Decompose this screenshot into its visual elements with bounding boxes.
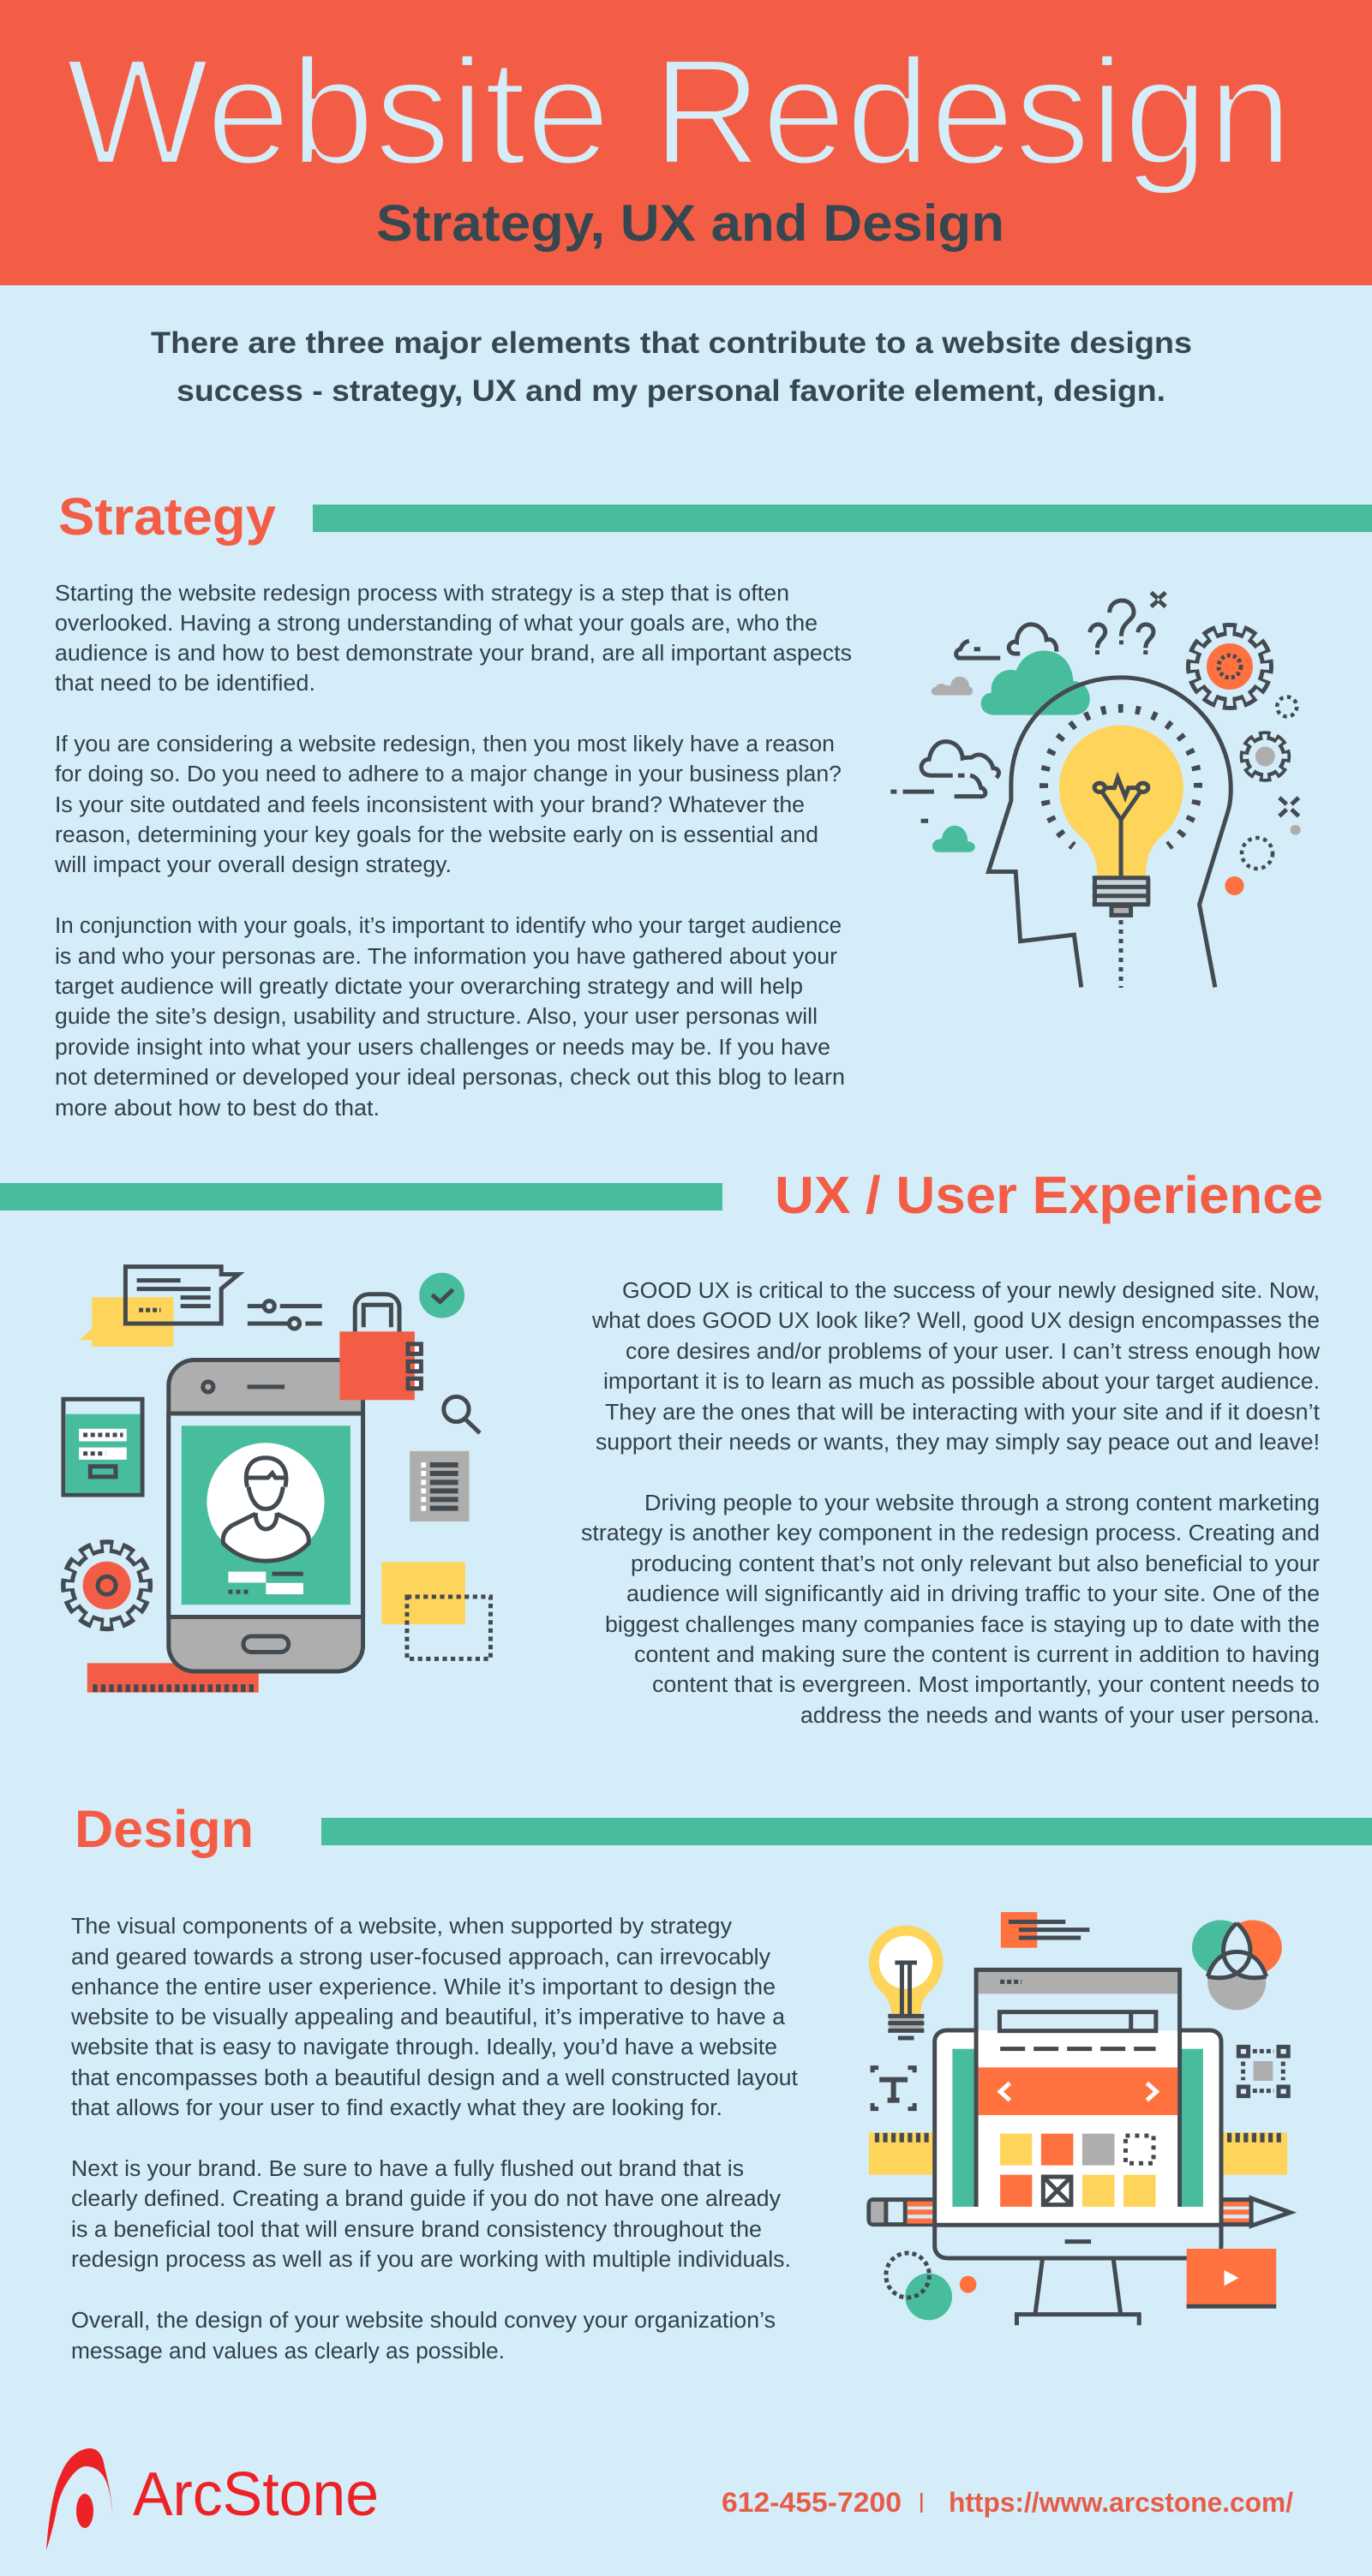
text block: ux: content that is evergreen. Most importantly, your content needs to: [652, 1673, 1320, 1697]
text block: ux: core desires and/or problems of your user. I can’t stress enough how: [626, 1340, 1321, 1364]
intro text: success - strategy, UX and my personal favorite element, design.: [177, 374, 1165, 408]
text block: ux: strategy is another key component in the redesign process. Creating and: [581, 1521, 1320, 1545]
text block: design: The visual components of a website, when supported by strategy: [71, 1915, 732, 1939]
text block: strategy: that need to be identified.: [55, 672, 315, 696]
text block: strategy: guide the site’s design, usability and structure. Also, your user personas will: [55, 1005, 818, 1029]
text block: design: enhance the entire user experience. While it’s important to design the: [71, 1975, 776, 1999]
text block: ux: GOOD UX is critical to the success of your newly designed site. Now,: [622, 1279, 1320, 1303]
heading: design: Design: [75, 1800, 254, 1858]
text block: design: website that is easy to navigate through. Ideally, you’d have a website: [70, 2035, 777, 2059]
text block: ux: Driving people to your website through a strong content marketing: [644, 1491, 1320, 1515]
text block: ux: support their needs or wants, they may simply say peace out and leave!: [596, 1431, 1320, 1455]
text block: design: Overall, the design of your website should convey your organization’s: [71, 2309, 776, 2333]
text block: design: is a beneficial tool that will ensure brand consistency throughout the: [71, 2218, 762, 2242]
logo: ArcStone: ArcStone: [133, 2460, 379, 2529]
icon: small gear: [1243, 735, 1286, 778]
heading: ux: UX / User Experience: [775, 1166, 1323, 1224]
intro text: [151, 326, 1192, 408]
illustration: desktop monitor with website layout: [869, 1912, 1291, 2325]
text block: strategy: is and who your personas are. The information you have gathered about your: [55, 945, 838, 969]
text block: design: that encompasses both a beautiful design and a well constructed layout: [71, 2066, 798, 2090]
text block: strategy: provide insight into what your users challenges or needs may be. If you have: [55, 1036, 830, 1060]
subtitle: Strategy, UX and Design: [376, 194, 1004, 252]
logo: ArcStone: [46, 2448, 379, 2550]
title: Website Redesign: [66, 28, 1292, 196]
panel: ux: [0, 1166, 1323, 1728]
text block: design: redesign process as well as if you are working with multiple individuals.: [71, 2248, 791, 2272]
radial dashes around bulb: [1044, 708, 1198, 846]
text block: strategy: for doing so. Do you need to adhere to a major change in your business plan?: [55, 762, 842, 786]
icon: settings gear: [67, 1545, 147, 1625]
text block: strategy: more about how to best do that.: [55, 1097, 380, 1121]
text block: strategy: Starting the website redesign process with strategy is a step that is often: [55, 582, 789, 606]
text block: strategy: If you are considering a website redesign, then you most likely have a reason: [55, 732, 835, 756]
panel: design: [70, 1800, 1372, 2364]
contact phone: 612-455-7200: [722, 2487, 902, 2518]
text block: ux: audience will significantly aid in driving traffic to your site. One of the: [626, 1582, 1320, 1606]
heading: strategy: Strategy: [58, 487, 276, 546]
text block: ux: producing content that’s not only relevant but also beneficial to your: [631, 1552, 1321, 1576]
text block: strategy: In conjunction with your goals, it’s important to identify who your target audience: [55, 914, 842, 938]
text block: strategy: [54, 582, 852, 1121]
text block: design: that allows for your user to find exactly what they are looking for.: [71, 2096, 722, 2120]
heading bar: design: [321, 1818, 1372, 1845]
text block: strategy: overlooked. Having a strong understanding of what your goals are, who the: [55, 612, 818, 636]
text block: strategy: not determined or developed your ideal personas, check out this blog to learn: [55, 1066, 845, 1090]
text block: design: website to be visually appealing and beautiful, it’s imperative to have a: [70, 2005, 786, 2029]
text block: design: Next is your brand. Be sure to have a fully flushed out brand that is: [71, 2157, 744, 2181]
text block: design: message and values as clearly as possible.: [71, 2340, 505, 2364]
contact url: https://www.arcstone.com/: [949, 2487, 1293, 2518]
text block: design: and geared towards a strong user-focused approach, can irrevocably: [71, 1945, 770, 1969]
text block: ux: address the needs and wants of your user persona.: [800, 1704, 1320, 1728]
text block: ux: They are the ones that will be interacting with your site and if it doesn’t: [605, 1401, 1320, 1425]
text block: strategy: target audience will greatly dictate your overarching strategy and will help: [55, 975, 803, 999]
illustration: head with light bulb: [890, 593, 1301, 988]
icon: large gear: [1191, 629, 1268, 704]
text block: ux: what does GOOD UX look like? Well, good UX design encompasses the: [591, 1309, 1320, 1333]
text block: strategy: audience is and how to best demonstrate your brand, are all important aspects: [55, 642, 852, 666]
text block: ux: important it is to learn as much as possible about your target audience.: [603, 1370, 1320, 1394]
heading bar: ux: [0, 1183, 722, 1210]
text block: design: [70, 1915, 798, 2364]
panel: strategy: [54, 487, 1372, 1121]
text block: strategy: reason, determining your key goals for the website early on is essential and: [55, 823, 818, 847]
text block: strategy: Is your site outdated and feels inconsistent with your brand? Whatever the: [55, 793, 805, 817]
panel: header banner: [0, 0, 1372, 285]
intro text: There are three major elements that contribute to a website designs: [151, 326, 1192, 360]
text block: ux: [581, 1279, 1321, 1728]
heading bar: strategy: [313, 505, 1372, 532]
text block: strategy: will impact your overall design strategy.: [54, 853, 452, 877]
illustration: smartphone with user profile: [63, 1267, 490, 1693]
contact divider: [920, 2493, 922, 2513]
panel: footer: [46, 2448, 1293, 2550]
text block: ux: biggest challenges many companies face is staying up to date with the: [605, 1613, 1320, 1637]
text block: design: clearly defined. Creating a brand guide if you do not have one already: [71, 2187, 781, 2211]
text block: ux: content and making sure the content is current in addition to having: [634, 1643, 1320, 1667]
